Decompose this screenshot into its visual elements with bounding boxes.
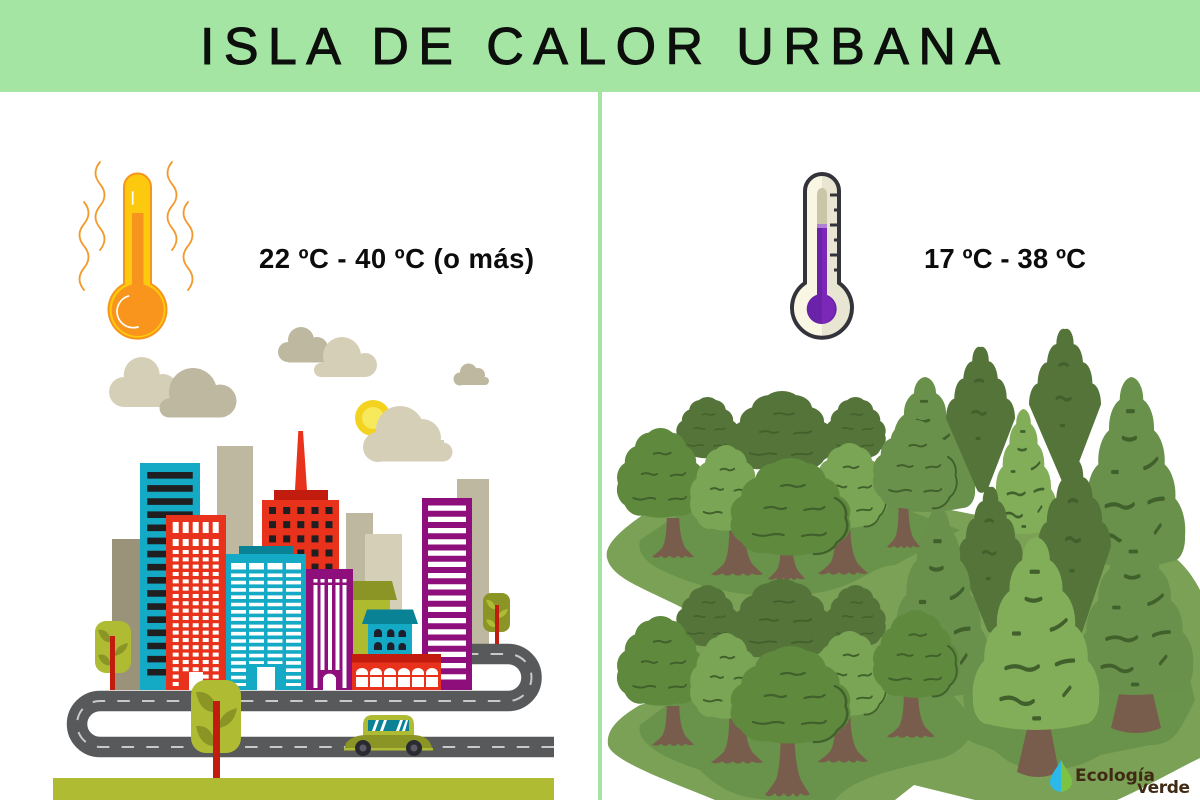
tree — [873, 420, 959, 548]
sun — [355, 400, 391, 436]
tree — [730, 458, 851, 580]
building: green house — [353, 581, 397, 654]
temperature label: forest: 17 ºC - 38 ºC — [924, 243, 1086, 274]
icon: leaf drop — [1050, 760, 1072, 792]
ground strip — [53, 778, 554, 800]
tree — [690, 633, 763, 764]
tree — [690, 445, 763, 576]
tree: front — [191, 680, 241, 778]
tree — [617, 428, 704, 558]
tree — [873, 610, 959, 738]
back trees, upper row — [676, 391, 886, 471]
deciduous trees, upper row — [617, 420, 959, 580]
building: purple tower — [422, 498, 472, 690]
building: teal house — [362, 610, 418, 654]
building: red tower with spire — [262, 431, 339, 575]
large light conifer, front — [973, 537, 1099, 777]
conifers, back — [875, 329, 1185, 697]
cloud — [363, 406, 452, 462]
clouds and sun — [109, 327, 489, 462]
car — [344, 715, 433, 756]
cloud — [454, 364, 489, 386]
icon: hot thermometer with heat waves — [80, 162, 192, 339]
center divider — [598, 92, 602, 800]
icon: cool thermometer — [792, 174, 852, 338]
tree — [617, 616, 704, 746]
tree — [811, 443, 888, 575]
deciduous trees, lower row — [617, 610, 959, 796]
tree — [730, 646, 851, 796]
cloud — [278, 327, 328, 362]
road — [77, 654, 554, 747]
cloud — [109, 357, 177, 407]
building: red office block — [166, 515, 226, 690]
logo text: Ecología — [1075, 766, 1155, 786]
building: low red shop — [352, 654, 441, 690]
title banner — [0, 0, 1200, 92]
city illustration — [53, 431, 554, 800]
tree: left — [95, 621, 131, 690]
cloud — [160, 368, 236, 418]
logo text: verde — [1137, 778, 1190, 798]
large conifer, right — [1076, 520, 1193, 733]
cloud — [314, 337, 377, 377]
title: ISLA DE CALOR URBANA — [200, 18, 1000, 76]
forest ground — [607, 500, 1200, 800]
logo: Ecología Verde — [1050, 760, 1190, 798]
back trees, lower row — [676, 579, 886, 659]
tree — [811, 631, 888, 763]
background buildings — [112, 446, 489, 690]
forest illustration — [607, 329, 1200, 800]
tree: right — [483, 593, 510, 644]
temperature label: city: 22 ºC - 40 ºC (o más) — [259, 243, 534, 274]
building: purple stripes — [306, 569, 353, 690]
building: blue glass block — [226, 546, 306, 690]
building: blue tower — [140, 463, 200, 690]
